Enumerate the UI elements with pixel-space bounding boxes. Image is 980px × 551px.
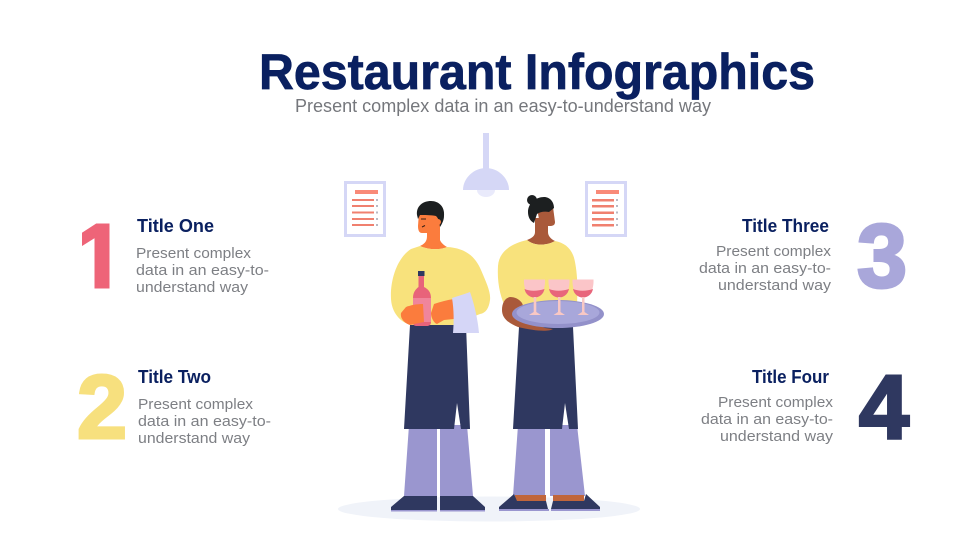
waiter shoes — [391, 496, 485, 512]
body text 3: data in an easy-to- — [699, 260, 831, 277]
icon: left wall menu — [346, 182, 384, 236]
heading: Title Three: Title Three — [742, 216, 829, 236]
body text 2 — [138, 396, 271, 447]
item 3 — [699, 207, 907, 307]
glass 2 — [548, 280, 570, 315]
figure: waiter with bottle — [391, 201, 490, 512]
glass 3 — [572, 280, 594, 315]
bottle — [413, 271, 431, 326]
heading: Title Two: Title Two — [138, 367, 211, 387]
item 4 — [701, 358, 909, 458]
heading: Title One: Title One — [137, 216, 214, 236]
number 1: 1 — [75, 207, 125, 307]
body text 2: data in an easy-to- — [138, 413, 271, 430]
infographic canvas — [78, 52, 910, 522]
body text 4: data in an easy-to- — [701, 411, 833, 428]
icon: ceiling lamp — [463, 133, 509, 197]
body text 2: understand way — [138, 430, 251, 447]
subtitle: Present complex data in an easy-to-understand way — [295, 96, 711, 116]
waitress sweater — [498, 240, 577, 325]
waiter apron — [404, 325, 470, 429]
body text 1: Present complex — [136, 245, 252, 262]
tray — [512, 300, 604, 328]
waitress apron — [513, 327, 578, 429]
number 2: 2 — [77, 358, 127, 458]
waiter neck and face — [418, 212, 447, 249]
waitress ankles — [515, 495, 584, 502]
body text 3: Present complex — [716, 243, 832, 260]
body text 3 — [699, 243, 832, 294]
item 2 — [77, 358, 271, 458]
heading: Title Four: Title Four — [752, 367, 829, 387]
waiter ear and facial marks — [421, 219, 441, 227]
glass 1 — [524, 280, 545, 315]
body text 4: understand way — [720, 428, 834, 445]
body text 2: Present complex — [138, 396, 254, 413]
body text 1 — [136, 245, 269, 296]
waitress neck and face — [527, 207, 555, 245]
waitress arm — [502, 297, 553, 331]
waitress hair — [527, 195, 554, 223]
waiter hands — [401, 299, 454, 325]
wine glasses — [524, 280, 594, 315]
item 1 — [82, 218, 268, 295]
waiter sweater — [391, 246, 490, 325]
body text 1: data in an easy-to- — [136, 262, 269, 279]
icon: right wall menu — [586, 182, 626, 236]
number 4: 4 — [859, 358, 909, 458]
body text 4 — [701, 394, 834, 445]
waitress legs — [513, 425, 585, 496]
waitress shoes — [499, 494, 600, 511]
body text 1: understand way — [136, 279, 249, 296]
body text 3: understand way — [718, 277, 832, 294]
illustration: floor shadow — [338, 496, 640, 522]
waiter hair — [417, 201, 444, 227]
title: Restaurant Infographics — [259, 44, 815, 100]
number 3: 3 — [857, 207, 907, 307]
body text 4: Present complex — [718, 394, 834, 411]
towel — [452, 292, 479, 333]
figure: waitress with tray — [498, 195, 604, 511]
waiter legs — [404, 425, 473, 496]
